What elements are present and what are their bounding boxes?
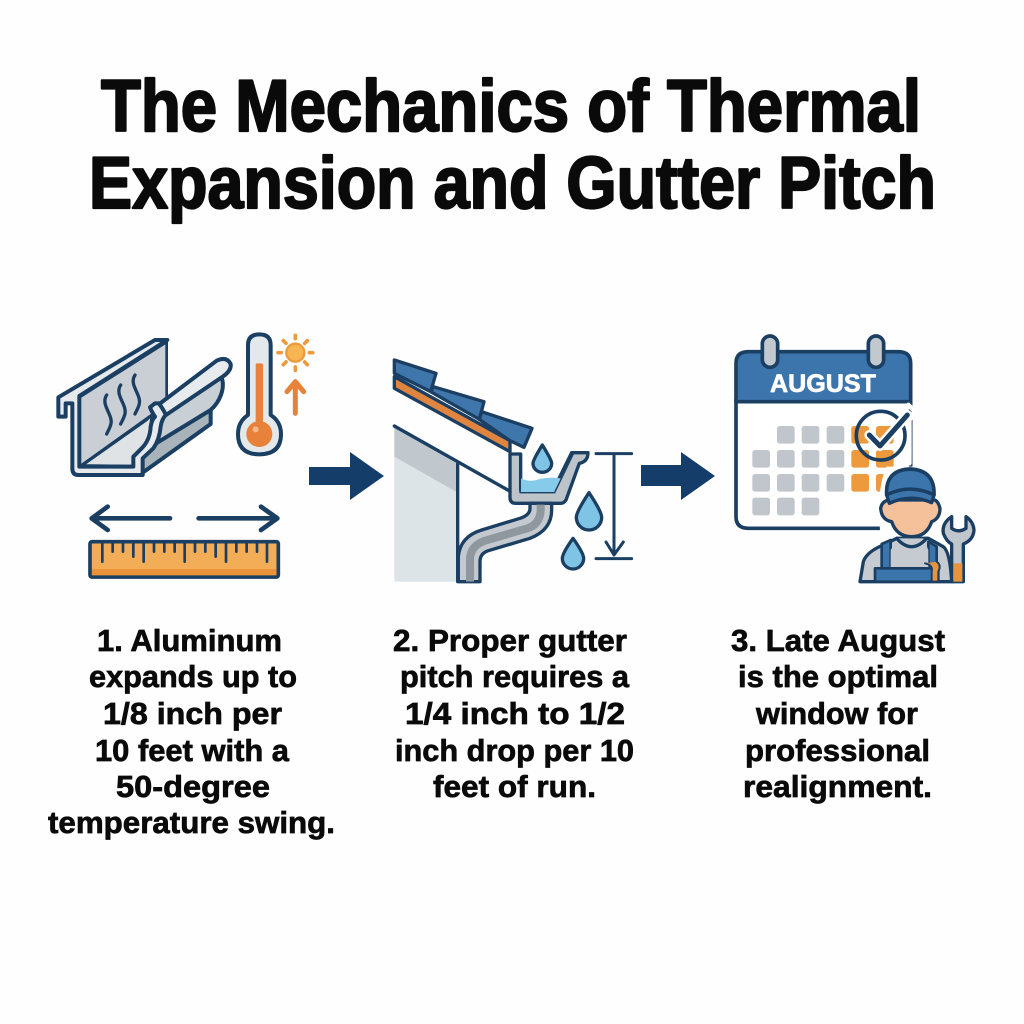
icon: water drops [533, 445, 602, 569]
text block: step 2 [393, 623, 634, 804]
text block: step 2: 1/4 inch to 1/2 [405, 696, 625, 731]
title [89, 66, 936, 224]
icon: sun [278, 335, 313, 370]
icon: thermometer [238, 334, 281, 454]
text block: step 1: temperature swing. [48, 805, 335, 840]
icon: aluminum gutter with heat [58, 340, 231, 475]
icon: calendar [736, 336, 911, 528]
text block: step 1: 50-degree [116, 769, 270, 804]
text block: step 3 [731, 623, 945, 804]
text block: step 2: 2. Proper gutter [393, 623, 627, 658]
text block: step 2: pitch requires a [400, 659, 630, 694]
icon: roof shingles [394, 360, 532, 452]
title: The Mechanics of Thermal [101, 66, 921, 147]
icon: heat waves [105, 375, 140, 434]
title: Expansion and Gutter Pitch [89, 143, 936, 224]
panel: thermal expansion illustration [58, 334, 313, 577]
panel: calendar and technician illustration [736, 336, 974, 583]
text block: step 3: 3. Late August [731, 623, 945, 658]
wall [394, 426, 511, 582]
icon: wrench [943, 517, 974, 582]
icon: drop measurement [596, 454, 632, 559]
text block: step 1: expands up to [89, 659, 297, 694]
text block: step 3: is the optimal [738, 659, 938, 694]
icon: check mark badge [856, 405, 915, 463]
text block: step 3: professional [745, 733, 930, 768]
icon: calendar: AUGUST [770, 371, 876, 398]
text block: step 1 [48, 623, 335, 840]
calendar day grid [752, 426, 894, 515]
arrow: step 1 to step 2 [309, 452, 384, 500]
text block: step 1: 1. Aluminum [97, 623, 282, 658]
arrow: step 2 to step 3 [641, 452, 715, 500]
panel: gutter pitch illustration [394, 360, 632, 582]
icon: downspout [458, 503, 552, 582]
icon: technician [860, 467, 967, 583]
icon: gutter with water [510, 453, 588, 503]
text block: step 2: feet of run. [433, 769, 596, 804]
icon: ruler [90, 542, 278, 577]
text block: step 2: inch drop per 10 [395, 733, 634, 768]
icon: expansion arrows [92, 507, 277, 530]
icon: rising arrow [287, 382, 304, 413]
text block: step 3: window for [755, 696, 918, 731]
text block: step 1: 1/8 inch per [103, 696, 282, 731]
text block: step 3: realignment. [743, 769, 932, 804]
text block: step 1: 10 feet with a [95, 733, 290, 768]
